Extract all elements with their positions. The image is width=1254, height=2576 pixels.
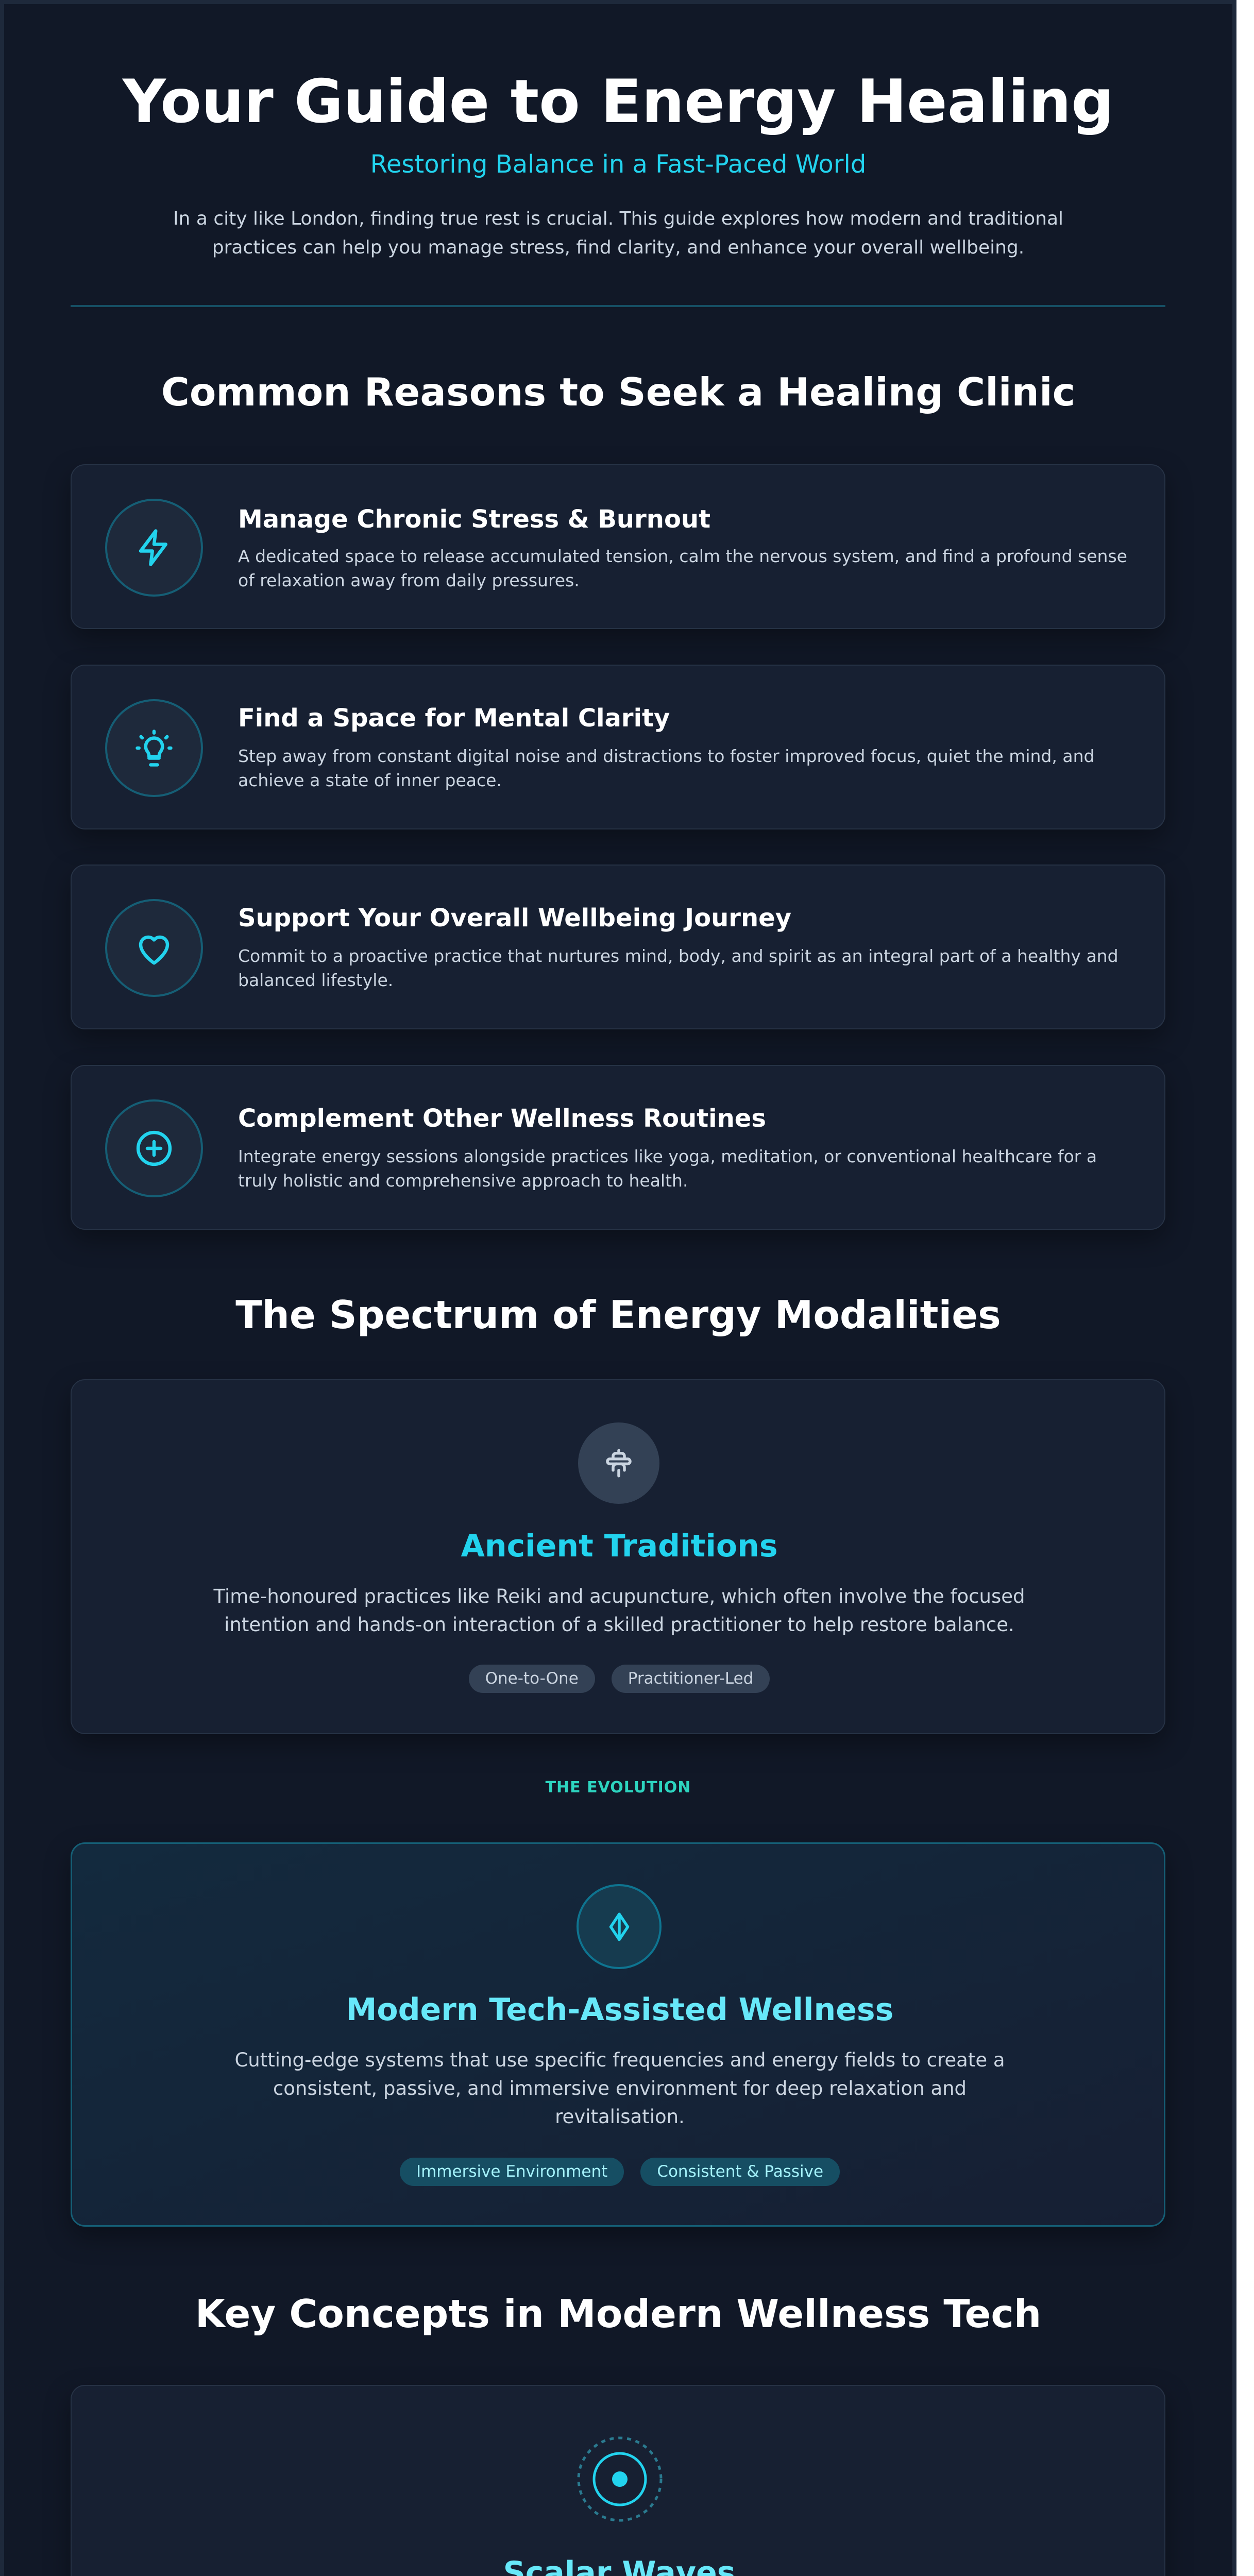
- card text: Integrate energy sessions alongside practices like yoga, meditation, or conventional healthcare for a truly holistic and comprehensive approach to health.: [238, 1146, 1097, 1191]
- card text: Commit to a proactive practice that nurtures mind, body, and spirit as an integral part of a healthy and balanced lifestyle.: [238, 946, 1119, 990]
- icon: diamond: [577, 1884, 662, 1969]
- icon: plus circle: [105, 1099, 203, 1197]
- tags: [469, 1665, 770, 1693]
- heading: key concepts: Key Concepts in Modern Wellness Tech: [195, 2291, 1041, 2336]
- tags: [400, 2158, 840, 2186]
- subtitle: Restoring Balance in a Fast-Paced World: [370, 150, 866, 179]
- card: wellbeing: [71, 865, 1165, 1029]
- card title: Complement Other Wellness Routines: [238, 1104, 766, 1133]
- icon: scalar: [577, 2437, 663, 2521]
- icon: heart: [105, 899, 203, 997]
- card: stress: [71, 464, 1165, 629]
- label: the evolution: THE EVOLUTION: [546, 1778, 691, 1797]
- tags: One-to-One: [485, 1669, 579, 1688]
- icon: ancient: [578, 1422, 659, 1504]
- card title: Manage Chronic Stress & Burnout: [238, 505, 710, 534]
- card title: Find a Space for Mental Clarity: [238, 704, 670, 733]
- panel: ancient traditions: [71, 1379, 1165, 1734]
- card title: Support Your Overall Wellbeing Journey: [238, 904, 791, 933]
- intro text: In a city like London, finding true rest is crucial. This guide explores how modern and traditional practices can help you manage stress, find clarity, and enhance your overall wellbeing.: [173, 208, 1063, 258]
- card: clarity: [71, 665, 1165, 829]
- title: Your Guide to Energy Healing: [123, 67, 1114, 137]
- text: Cutting-edge systems that use specific frequencies and energy fields to create a consistent, passive, and immersive environment for deep relaxation and revitalisation.: [234, 2049, 1005, 2128]
- tags: Practitioner-Led: [628, 1669, 753, 1688]
- icon: lightning: [105, 499, 203, 597]
- tags: Consistent & Passive: [657, 2162, 823, 2181]
- heading: spectrum: The Spectrum of Energy Modalities: [235, 1292, 1001, 1337]
- card text: Step away from constant digital noise and distractions to foster improved focus, quiet the mind, and achieve a state of inner peace.: [238, 746, 1094, 790]
- heading: common reasons: Common Reasons to Seek a Healing Clinic: [161, 369, 1075, 415]
- icon: lightbulb: [105, 699, 203, 797]
- text: Time-honoured practices like Reiki and acupuncture, which often involve the focused intention and hands-on interaction of a skilled practitioner to help restore balance.: [213, 1585, 1025, 1636]
- title: Modern Tech-Assisted Wellness: [346, 1992, 893, 2028]
- card: complement: [71, 1065, 1165, 1230]
- panel: modern tech: [71, 1842, 1165, 2227]
- card text: A dedicated space to release accumulated tension, calm the nervous system, and find a profound sense of relaxation away from daily pressures.: [238, 546, 1127, 590]
- panel: scalar waves: [71, 2385, 1165, 2576]
- tags: Immersive Environment: [416, 2162, 607, 2181]
- title: Ancient Traditions: [461, 1528, 778, 1564]
